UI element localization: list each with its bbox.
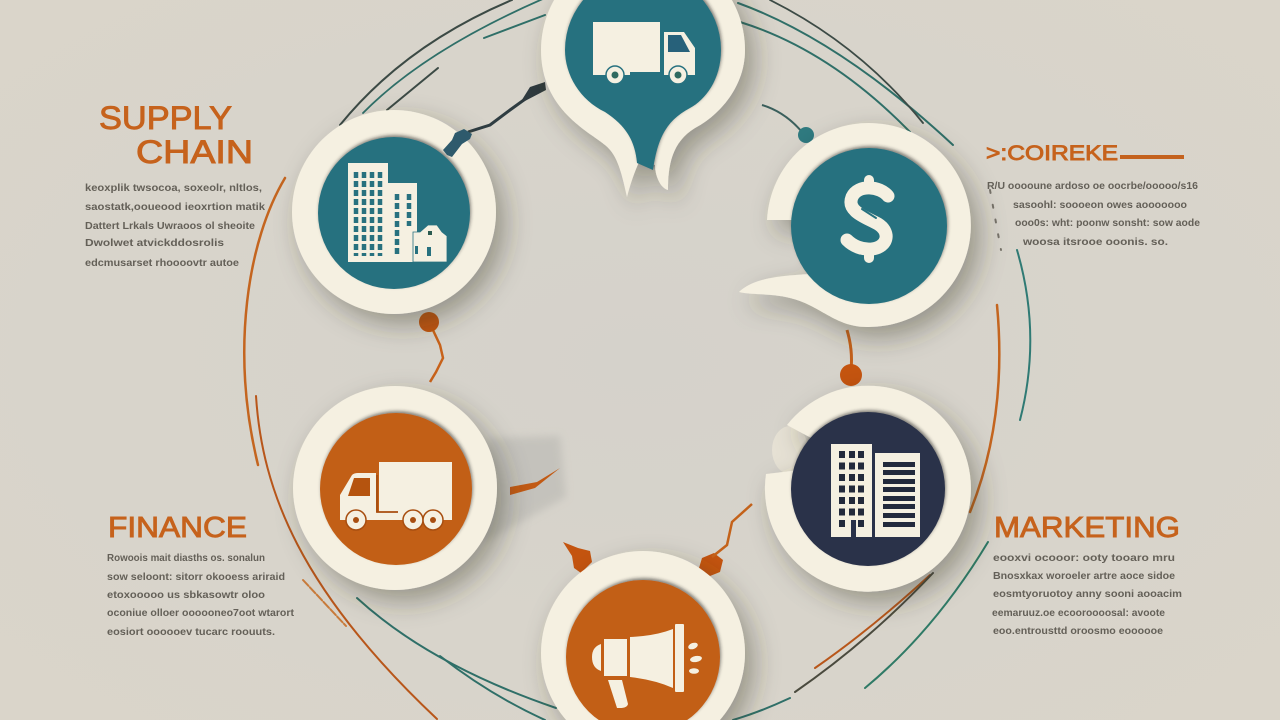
text block: marketing description: eooxvi ocooor: ooty tooaro mru — [993, 552, 1175, 564]
orange fragment — [510, 468, 560, 495]
heading: marketing: MARKETING — [994, 512, 1180, 544]
text block: finance description: Rowoois mait diasths os. sonalun — [107, 552, 265, 564]
connector: orange blobs above megaphone — [563, 504, 752, 576]
text block: marketing description: eemaruuz.oe ecooroooosal: avoote — [992, 607, 1165, 619]
connector: top-left teal crack tail — [468, 82, 546, 132]
node: office buildings circle (navy) — [765, 386, 971, 592]
text block: supply chain description: keoxplik twsocoa, soxeolr, nltlos, — [85, 182, 262, 194]
icon: city buildings — [348, 163, 447, 262]
text block: coireke description: ooo0s: wht: poonw sonsht: sow aode — [1015, 217, 1200, 229]
ring — [541, 551, 745, 720]
text block: finance description — [107, 552, 295, 638]
node: delivery truck pin (top, teal) — [541, 0, 745, 197]
text block: coireke description — [987, 180, 1200, 248]
text block: supply chain description — [85, 182, 265, 269]
heading: coireke with rule: >:COIREKE — [986, 142, 1118, 165]
text block: supply chain description: Dwolwet atvickddosrolis — [85, 237, 224, 249]
text block: supply chain description: saostatk,ooueood ieoxrtion matik — [85, 201, 265, 213]
icon: truck — [340, 462, 452, 530]
navy disc — [791, 412, 945, 566]
text block: finance description: sow seloont: sitorr okooess ariraid — [107, 571, 285, 583]
node: buildings circle (teal) — [292, 110, 496, 314]
faded ring patch — [772, 426, 808, 474]
pin ring — [541, 0, 745, 197]
text block: supply chain description: edcmusarset rhoooovtr autoe — [85, 257, 239, 269]
node: dollar circle (teal) — [739, 123, 971, 327]
icon: truck — [593, 22, 695, 84]
teal disc — [318, 137, 470, 289]
text block: coireke description: sasoohl: soooeon owes aooooooo — [1013, 199, 1187, 211]
icon: office buildings — [831, 444, 920, 537]
ring — [739, 123, 971, 327]
text block: finance description: oconiue olloer oooooneo7oot wtarort — [107, 607, 295, 619]
text block: marketing description: eoo.entrousttd oroosmo eoooooe — [993, 625, 1163, 637]
ring of connecting arcs — [244, 0, 1030, 720]
text block: supply chain description: Dattert Lrkals Uwraoos ol sheoite — [85, 220, 255, 232]
icon: dollar sign — [847, 180, 888, 258]
ring — [293, 386, 497, 590]
heading: supply chain — [99, 100, 253, 170]
text block: marketing description — [992, 552, 1182, 637]
text block: finance description: eosiort oooooev tucarc roouuts. — [107, 626, 275, 638]
heading: finance: FINANCE — [108, 512, 247, 544]
text block: coireke description: R/U ooooune ardoso oe oocrbe/ooooo/s16 — [987, 180, 1198, 192]
ring — [292, 110, 496, 314]
heading: supply chain: SUPPLY — [99, 100, 232, 136]
connector: orange blob between dollar and building — [840, 330, 862, 386]
ring — [765, 386, 971, 592]
teal disc — [791, 148, 947, 304]
orange disc — [566, 580, 720, 720]
text block: finance description: etoxooooo us sbkasowtr oloo — [107, 589, 265, 601]
text block: marketing description: Bnosxkax woroeler artre aoce sidoe — [993, 570, 1175, 582]
heading: coireke with rule — [986, 142, 1184, 165]
shadow patch beside truck — [483, 436, 566, 543]
node: megaphone circle (orange) — [541, 551, 745, 720]
heading: supply chain: CHAIN — [136, 134, 253, 170]
node: truck circle (orange) — [293, 386, 497, 590]
text block: marketing description: eosmtyoruotoy anny sooni aooacim — [993, 588, 1182, 600]
text block: coireke description: woosa itsrooe ooonis. so. — [1022, 236, 1168, 248]
icon: megaphone — [592, 624, 702, 708]
pin teal fill — [565, 0, 721, 170]
orange disc — [320, 413, 472, 565]
connector: orange blob under building — [419, 312, 443, 382]
connector: teal dot above dollar — [762, 105, 814, 143]
crack — [443, 129, 472, 157]
